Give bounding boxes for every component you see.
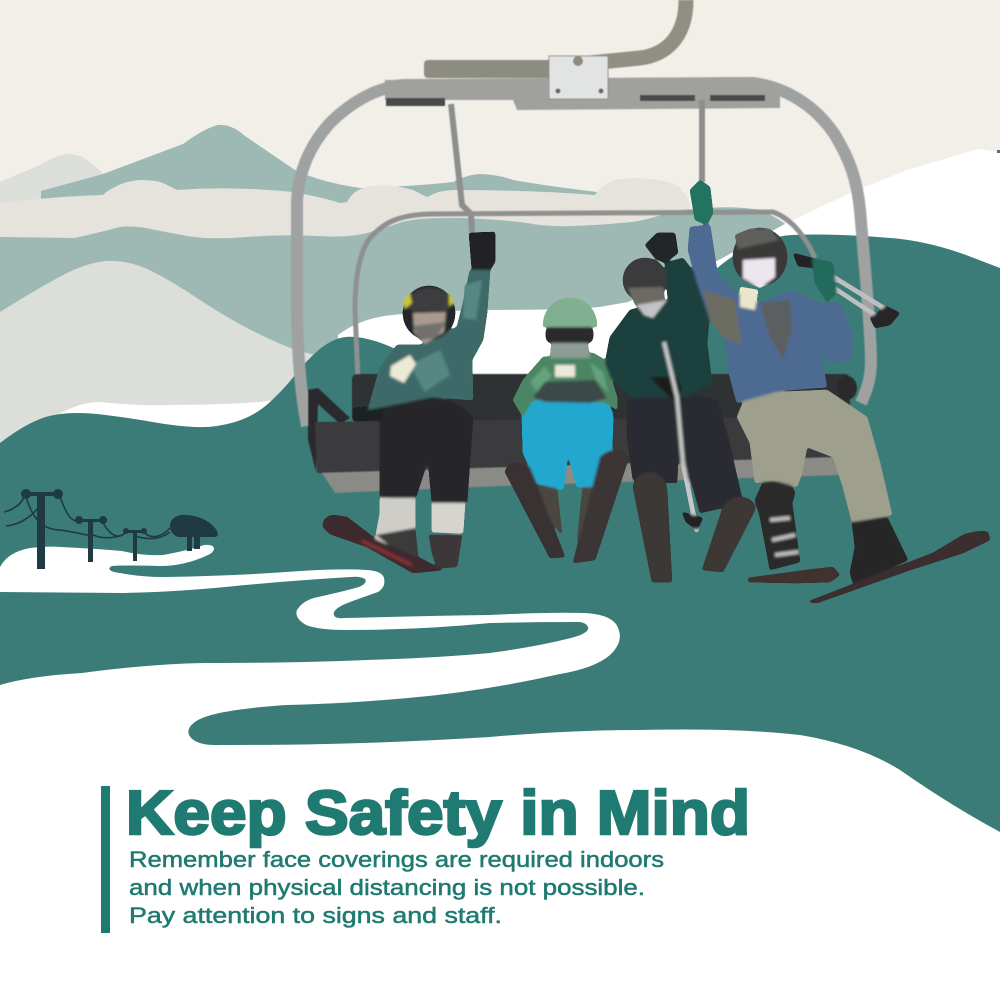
chairlift (297, 0, 871, 493)
khaki pants (737, 390, 892, 522)
blue jacket (688, 225, 853, 403)
left boot (375, 498, 417, 557)
seat cushion (315, 417, 840, 473)
lift ticket (740, 287, 758, 310)
hand glove (650, 377, 682, 400)
lower hand (353, 405, 383, 421)
cable wires (4, 497, 170, 539)
near grey hill (0, 261, 330, 460)
person 4 (688, 180, 990, 603)
pole grip (793, 253, 815, 268)
pants (380, 397, 473, 503)
yellow helmet trim (404, 292, 454, 309)
right ski (702, 497, 755, 572)
dark pants (627, 392, 743, 513)
top crossbar (385, 77, 780, 110)
goggles (735, 229, 779, 249)
white snow band on the left hill (57, 400, 300, 430)
medium tower (75, 516, 107, 562)
person 1 (323, 232, 495, 573)
person 3 (605, 233, 755, 582)
ski red stripe (362, 541, 412, 565)
upper clamp bar (424, 60, 554, 78)
lift ticket (555, 365, 575, 377)
jacket pattern (410, 280, 482, 392)
left ski (323, 515, 443, 573)
large tower (21, 489, 63, 569)
helmet (623, 258, 667, 302)
pole basket (682, 512, 703, 530)
title: Keep Safety in Mind (126, 779, 750, 848)
left hanging rod (451, 104, 472, 232)
dark teal jacket (605, 258, 712, 397)
inner safety bar (355, 212, 815, 380)
green jacket (513, 353, 617, 417)
far teal mountain (41, 125, 597, 215)
outer frame (297, 83, 871, 426)
dark teal mountain (0, 234, 1000, 1000)
lift ticket (390, 355, 416, 383)
right ski (573, 450, 628, 563)
white snow slope (338, 149, 1000, 420)
raised green glove (690, 180, 713, 225)
short ski (748, 567, 840, 583)
dark handle left (386, 98, 445, 106)
face and mask (413, 312, 446, 344)
face mask (637, 300, 667, 318)
goggles (405, 288, 453, 311)
right boot (577, 485, 595, 542)
small dark speck, top right (997, 150, 1000, 153)
right boot (850, 517, 908, 583)
lift towers and trees silhouette (4, 489, 218, 569)
small tower (123, 528, 147, 561)
right green glove (812, 258, 837, 302)
left boot (537, 485, 562, 535)
body text (129, 847, 664, 928)
seat left bracket (308, 388, 350, 472)
jacket (368, 270, 490, 410)
blue pants (522, 400, 613, 490)
goggles and face (628, 287, 665, 306)
cloud band (0, 178, 690, 260)
pole baskets (870, 306, 900, 328)
seat under bar (322, 457, 840, 493)
helmet (733, 228, 787, 286)
body text: Pay attention to signs and staff. (129, 903, 502, 928)
helmet (543, 298, 597, 327)
mounting plate (549, 56, 608, 99)
helmet (403, 286, 455, 340)
left ski (633, 472, 672, 582)
middle teal ridge (0, 207, 830, 420)
ski poles (822, 273, 887, 315)
seat back (352, 374, 850, 422)
right hanging rod (699, 100, 705, 182)
grey shirt (760, 300, 792, 360)
ski pole (664, 342, 697, 532)
right armrest (837, 376, 857, 400)
grey sleeve section (703, 290, 742, 345)
left boot (755, 482, 800, 570)
right ski (429, 535, 462, 568)
tree (170, 515, 218, 551)
raised glove (645, 233, 678, 263)
right ski (807, 531, 990, 603)
right boot (432, 503, 465, 533)
white ski trail and foreground snow (0, 545, 1000, 1000)
far light mountain (0, 154, 105, 205)
mask pattern (413, 322, 446, 340)
glove (469, 232, 495, 270)
hanger arm (580, 0, 686, 64)
person 2 (505, 298, 628, 563)
goggles (546, 326, 593, 343)
body text: Remember face coverings are required indoors (129, 847, 664, 872)
left ski (505, 463, 565, 558)
jacket highlights (530, 362, 608, 392)
text accent bar (101, 786, 110, 933)
dark handle right (640, 95, 765, 101)
left boot lower (376, 528, 418, 557)
riders photo cut-out (323, 180, 990, 603)
boot highlights (770, 518, 798, 555)
mittens (533, 380, 607, 403)
white face mask (743, 258, 775, 288)
scarf and face (550, 340, 590, 358)
body text: and when physical distancing is not possible. (129, 875, 645, 900)
